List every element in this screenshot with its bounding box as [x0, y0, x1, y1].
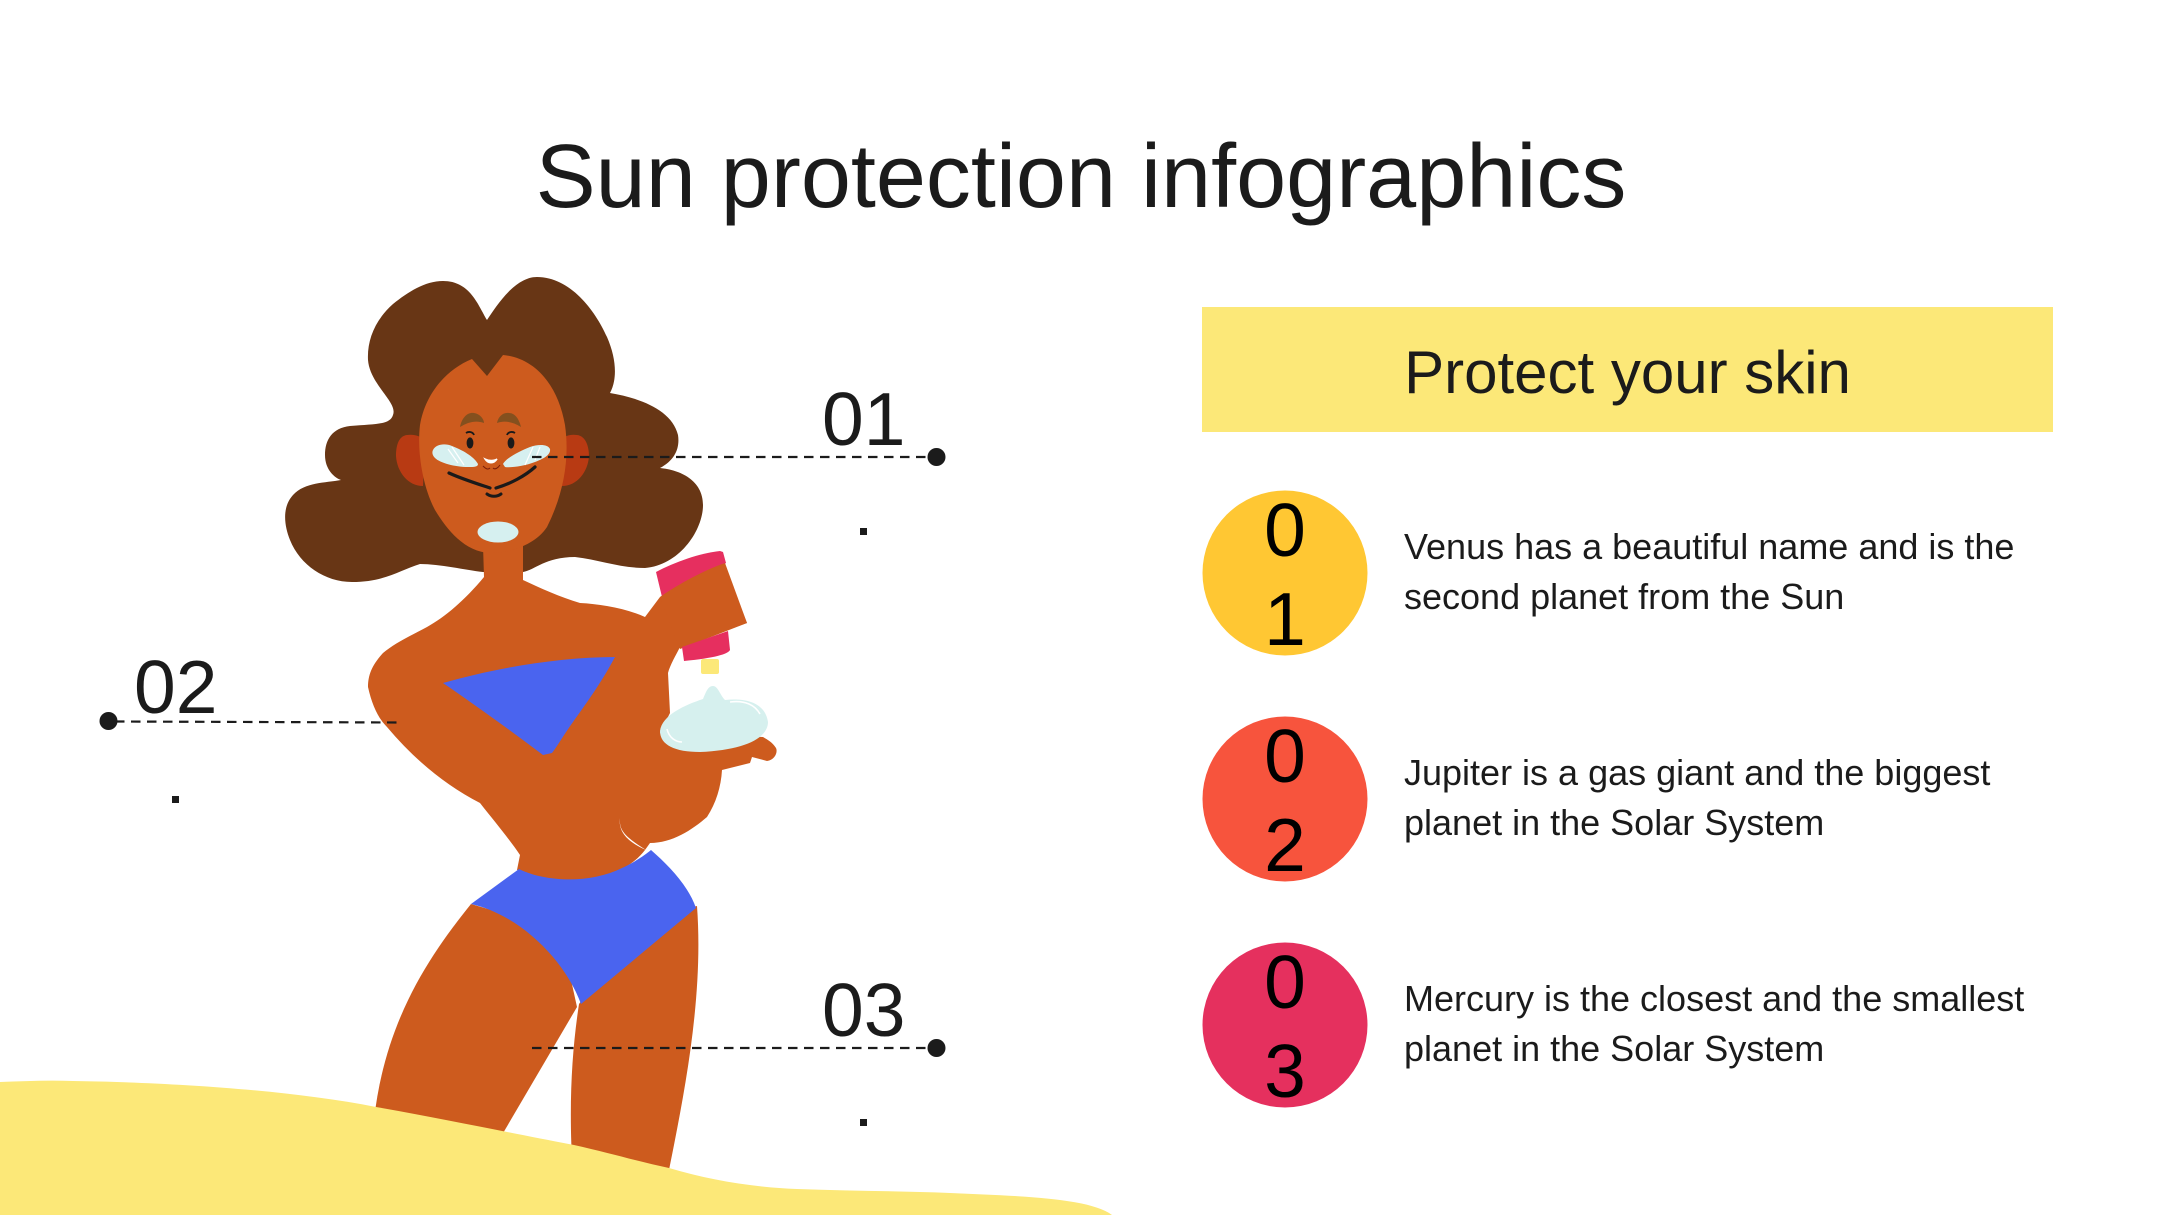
- panel header: protect your skin: Protect your skin: [1404, 339, 1851, 406]
- torso and arms: [368, 543, 777, 880]
- item 01: second planet from the Sun: [1404, 576, 1844, 617]
- callout 03: [532, 968, 946, 1126]
- title: Sun protection infographics: [536, 127, 1626, 227]
- item 03: 0: [1264, 940, 1306, 1024]
- item 02: Jupiter is a gas giant and the biggest: [1404, 752, 1990, 793]
- panel header: protect your skin: [1202, 307, 2053, 432]
- item 01: [1202, 488, 2014, 661]
- item 01: 1: [1264, 577, 1306, 661]
- sunscreen dollop in hand: [660, 686, 768, 752]
- item 01: 0: [1264, 488, 1306, 572]
- item 02: planet in the Solar System: [1404, 802, 1824, 843]
- sand dune: [0, 1081, 1112, 1215]
- hair: [285, 277, 703, 582]
- callout 01: 01: [822, 377, 905, 461]
- item 02: 2: [1264, 803, 1306, 887]
- sunscreen bottle: [656, 551, 747, 674]
- callout 01: [532, 377, 946, 535]
- item 02: 0: [1264, 714, 1306, 798]
- item 02: [1202, 714, 1990, 887]
- face: [419, 355, 567, 553]
- item 03: planet in the Solar System: [1404, 1028, 1824, 1069]
- callout 02: 02: [134, 645, 217, 729]
- bikini bottom: [471, 850, 696, 1004]
- item 01: Venus has a beautiful name and is the: [1404, 526, 2014, 567]
- arm crease: [620, 818, 646, 850]
- face details: [432, 413, 550, 542]
- ears: [396, 435, 589, 486]
- item 03: Mercury is the closest and the smallest: [1404, 978, 2024, 1019]
- legs: [374, 904, 698, 1180]
- item 03: [1202, 940, 2024, 1113]
- item 03: 3: [1264, 1029, 1306, 1113]
- callout 03: 03: [822, 968, 905, 1052]
- bikini top: [443, 657, 615, 755]
- illustration: woman applying sunscreen: [285, 277, 777, 1180]
- callout 02: [100, 645, 400, 803]
